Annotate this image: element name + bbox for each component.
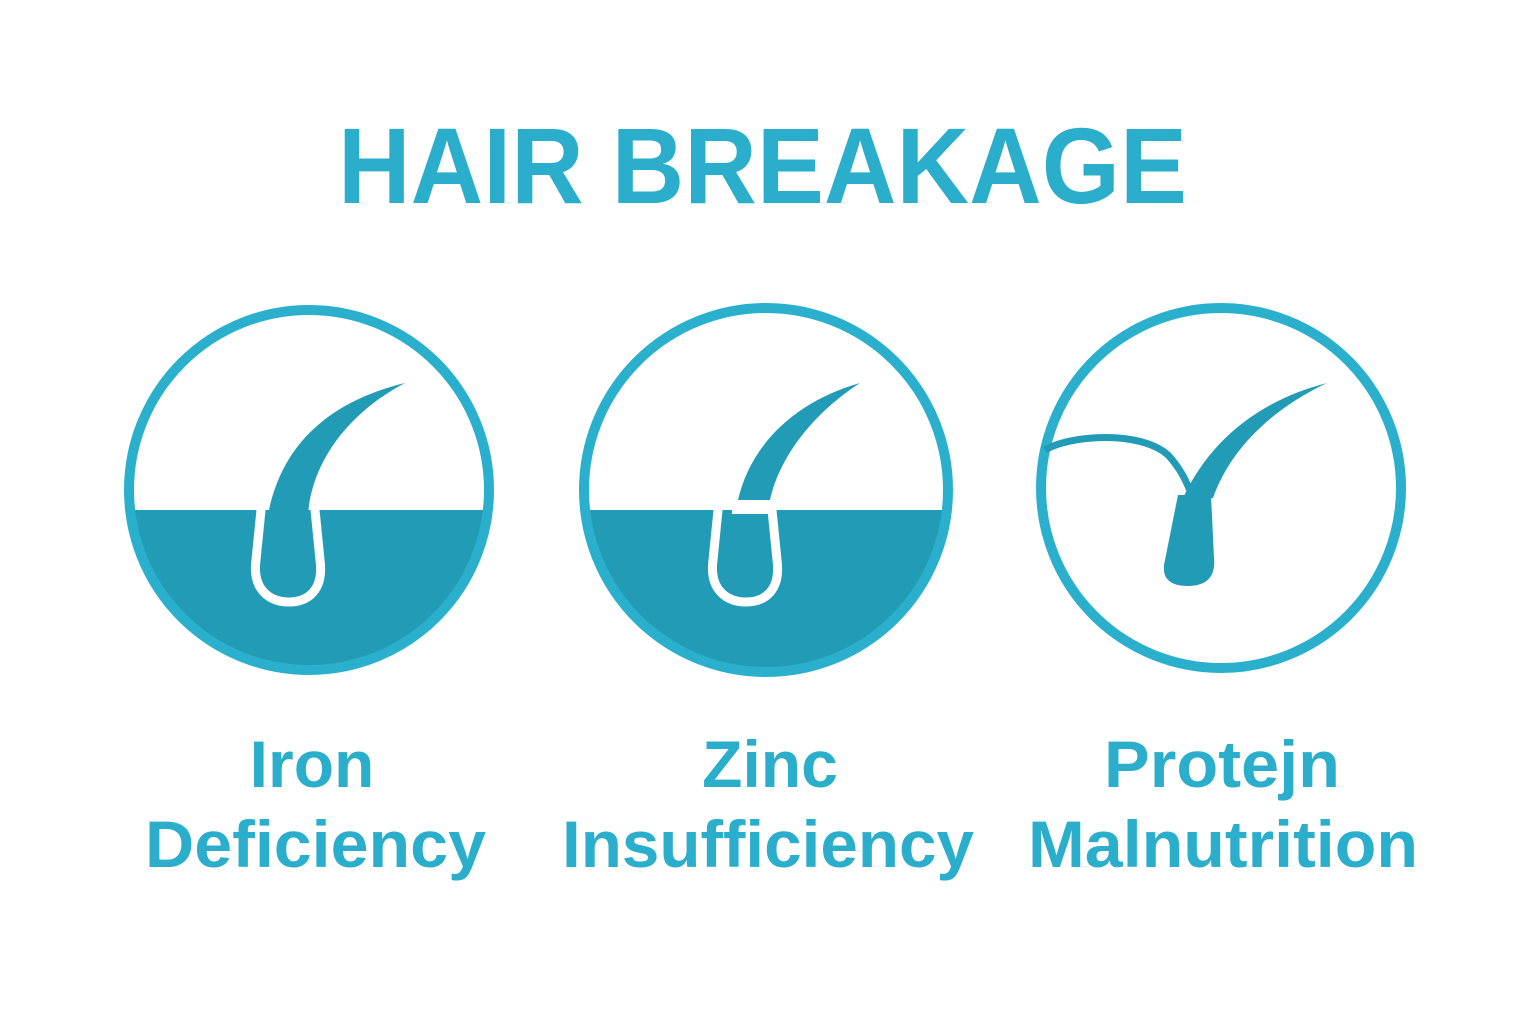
label: zinc insufficiency: Zinc (702, 727, 838, 801)
icon: zinc insufficiency broken hair (575, 308, 960, 690)
icon: protein malnutrition split hair (1041, 308, 1401, 668)
label: zinc insufficiency (562, 727, 974, 881)
label: iron deficiency: Deficiency (145, 807, 486, 881)
title: HAIR BREAKAGE (338, 105, 1187, 226)
label: iron deficiency: Iron (250, 727, 374, 801)
label: protein malnutrition: Malnutrition (1028, 807, 1418, 881)
label: zinc insufficiency: Insufficiency (562, 807, 974, 881)
icon: iron deficiency hair follicle (120, 310, 500, 690)
label: protein malnutrition (1028, 727, 1418, 881)
label: protein malnutrition: Protejn (1104, 727, 1340, 801)
label: iron deficiency (145, 727, 486, 881)
